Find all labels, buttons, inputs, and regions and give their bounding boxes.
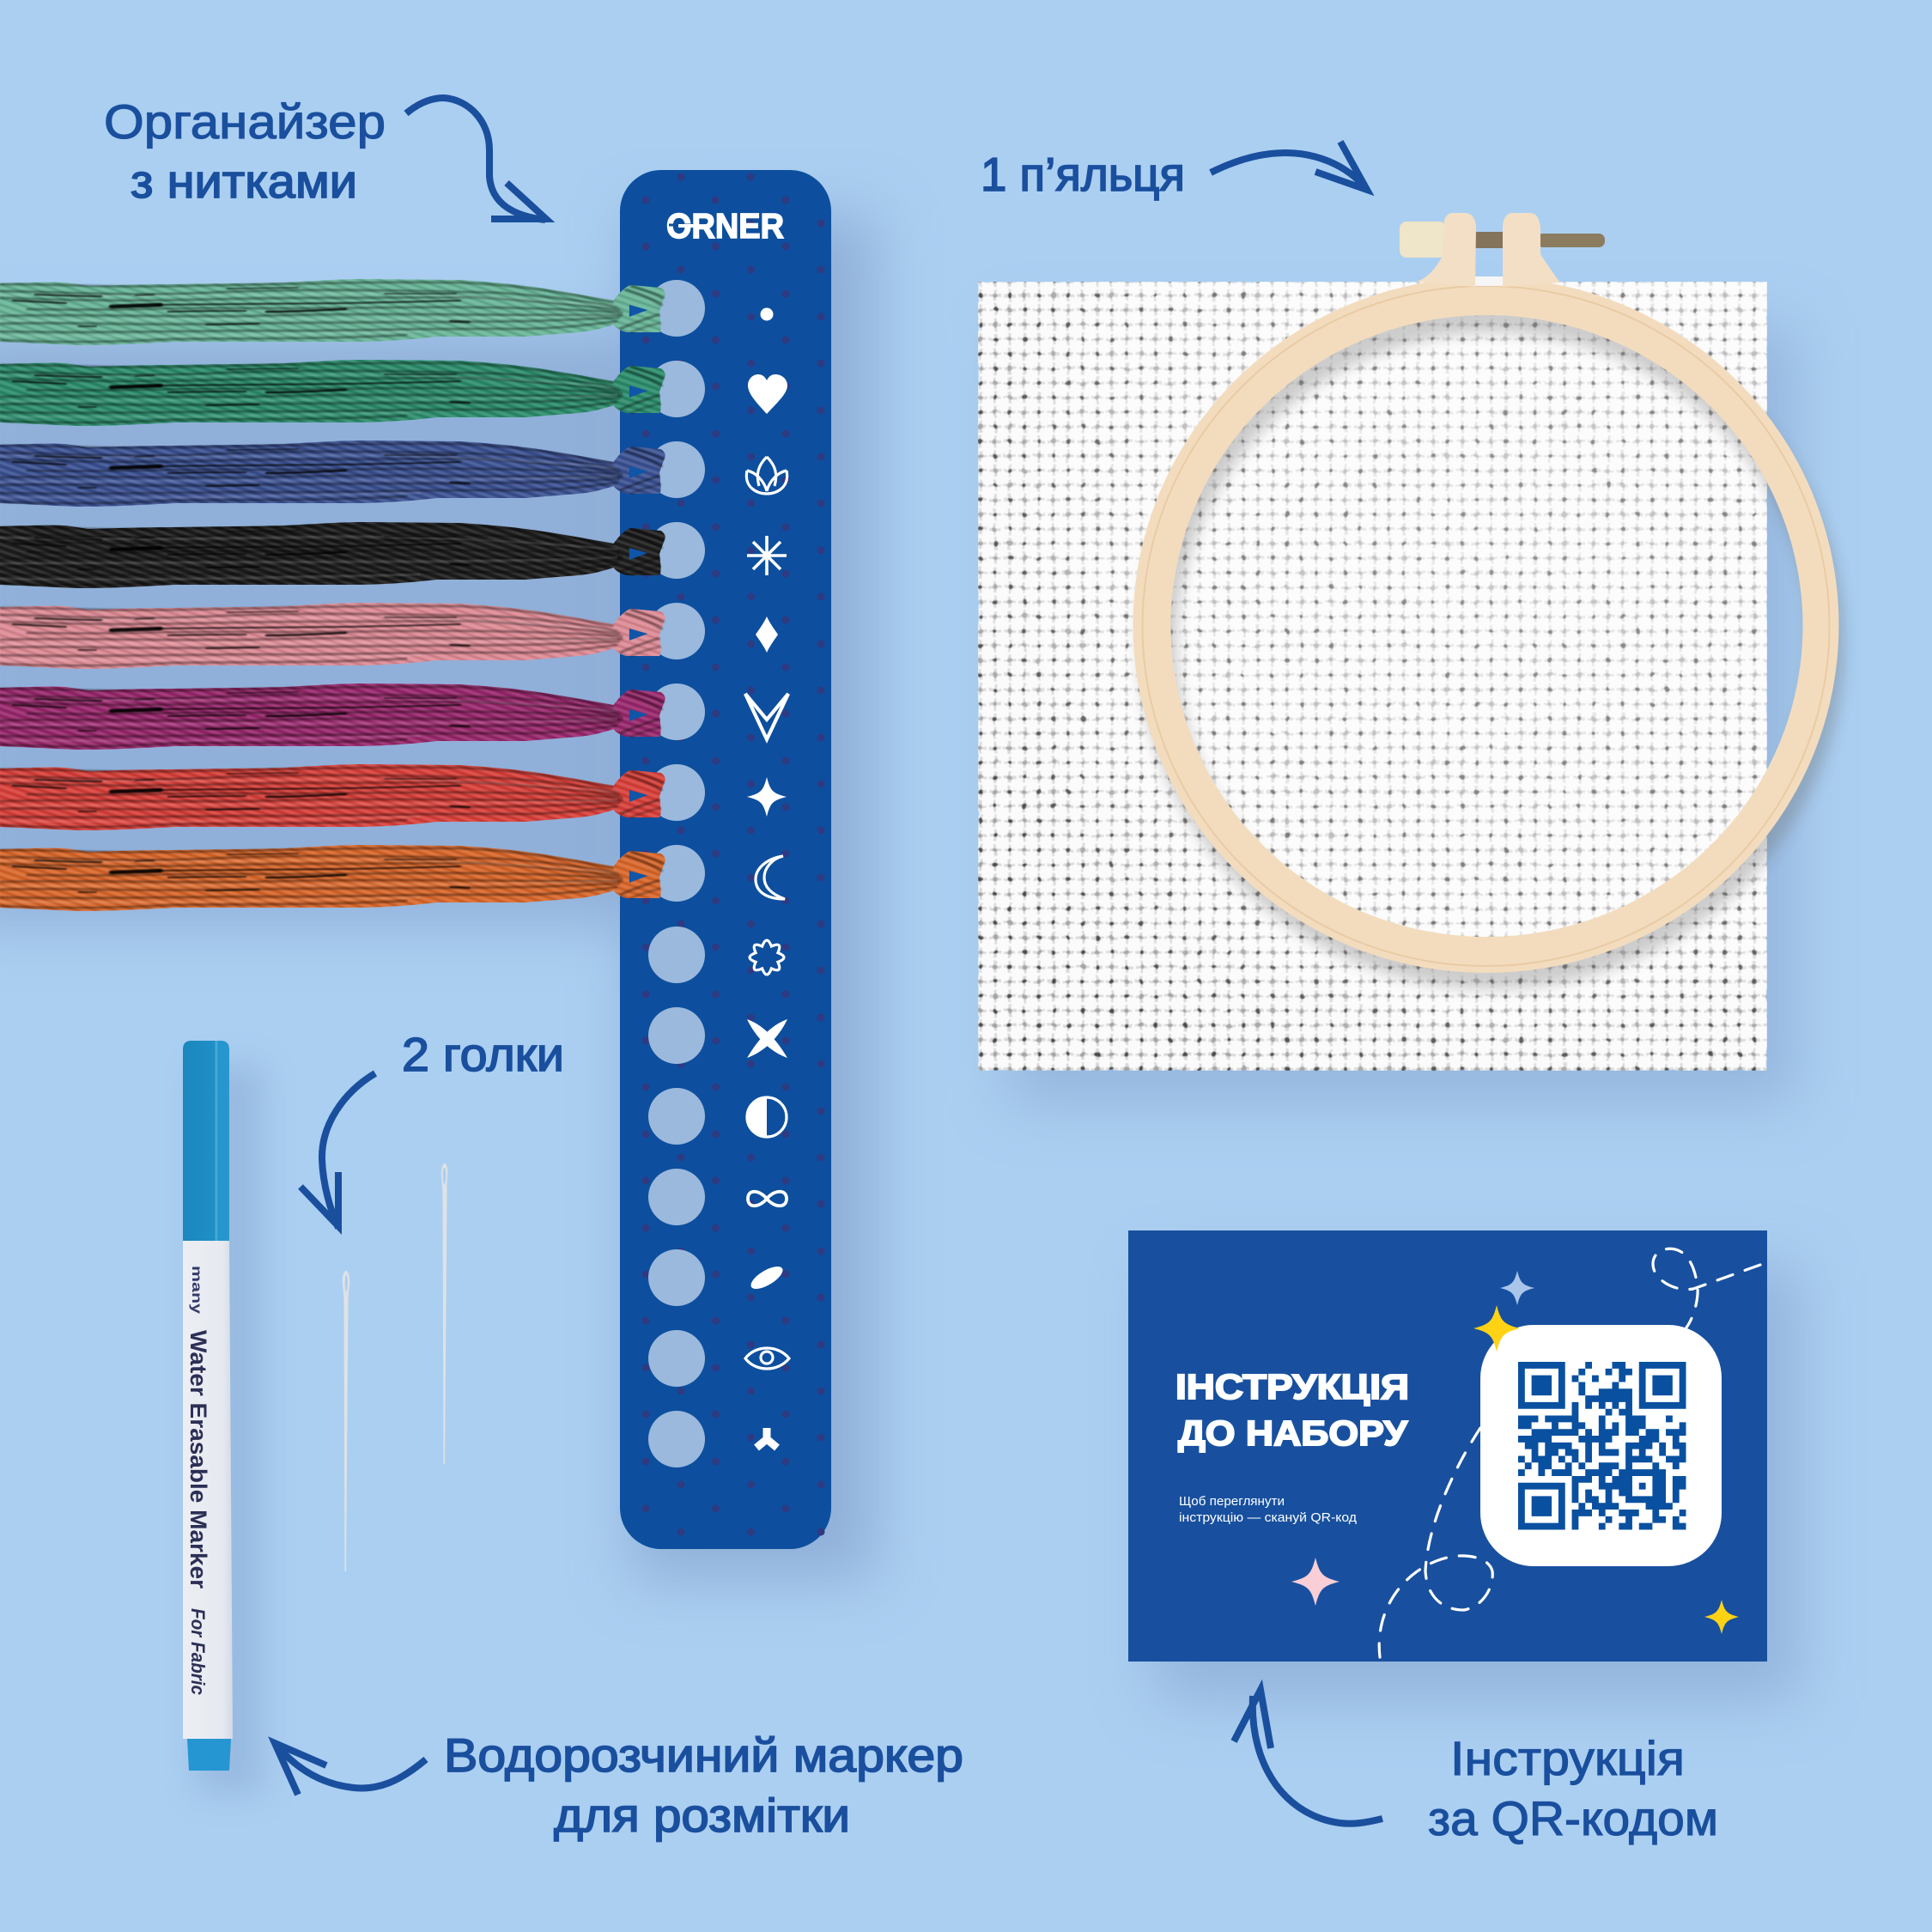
gap in the outer ring (1475, 276, 1503, 286)
marker lettering: for fabric: For Fabric (187, 1608, 209, 1695)
label: organizer with threads (104, 94, 386, 208)
icon: half circle (747, 1097, 787, 1137)
skein: red (0, 764, 665, 830)
polka dot pattern (641, 173, 825, 1532)
organizer card (620, 170, 831, 1549)
marker cap (183, 1041, 229, 1241)
aida fabric (978, 282, 1767, 1071)
icon: infinity (748, 1192, 787, 1206)
icon: arrowhead chevron (745, 694, 788, 739)
screw (1473, 232, 1605, 248)
icon: heart (748, 374, 787, 414)
card caption: інструкцію — скануй QR-код (1179, 1511, 1358, 1525)
card heading: ІНСТРУКЦІЯ (1176, 1367, 1409, 1406)
hoop shadow (1139, 295, 1844, 989)
arrow: to marker (275, 1743, 426, 1795)
card heading: ДО НАБОРУ (1178, 1413, 1408, 1453)
icon: asterisk (747, 536, 787, 575)
icon: dot (761, 307, 773, 321)
skein: pink (0, 603, 665, 669)
skein: orange (0, 845, 665, 911)
QR code (1518, 1362, 1686, 1530)
icon: flower (750, 940, 784, 975)
label: 2 needles: 2 голки (402, 1028, 564, 1081)
icon: oval leaf (748, 1262, 786, 1293)
skein: magenta (0, 683, 665, 750)
skein: emerald (0, 360, 665, 426)
icon: lotus (746, 457, 787, 494)
marker (183, 1041, 233, 1771)
hoop ring (1133, 277, 1839, 973)
icon: eye (745, 1348, 789, 1369)
ring highlight lines (1142, 286, 1829, 966)
tightening knob (1400, 222, 1446, 258)
dashed path (1379, 1249, 1760, 1657)
arrow: to needles (301, 1073, 375, 1228)
label: instruction via QR code (1428, 1731, 1718, 1845)
marker body (183, 1241, 233, 1739)
embroidery hoop (1133, 213, 1839, 973)
panel: thread organizer (620, 170, 831, 1549)
skein: indigo (0, 440, 665, 507)
card caption (1179, 1495, 1358, 1525)
icon: cross of leaves (747, 1019, 787, 1058)
marker lettering: Water Erasable Marker (185, 1330, 211, 1589)
star: small yellow (1704, 1600, 1739, 1634)
star: grey-blue (1500, 1271, 1534, 1305)
QR code plate (1480, 1325, 1722, 1566)
icon: four-point star (747, 777, 787, 817)
card caption: Щоб переглянути (1179, 1495, 1285, 1509)
icon: diamond (756, 617, 778, 653)
left bracket (1417, 213, 1476, 287)
label: organizer with threads: Органайзер (104, 94, 386, 149)
icon: three-arm shape (756, 1428, 777, 1448)
threads: eight coloured skeins (0, 279, 665, 911)
marker tip (187, 1739, 231, 1771)
star: pink (1291, 1558, 1340, 1606)
logo: ORNER: ORNER (666, 206, 784, 246)
marker brand: many (189, 1266, 204, 1314)
soft shadows under the objects (0, 215, 1799, 1700)
label: organizer with threads: з нитками (131, 155, 357, 208)
label: instruction via QR code: Інструкція (1450, 1731, 1685, 1785)
label: water-soluble marker: для розмітки (554, 1789, 850, 1842)
needle: left (343, 1271, 349, 1571)
star: large yellow (1473, 1305, 1520, 1352)
card heading (1176, 1367, 1409, 1453)
arrow: to instruction card (1234, 1690, 1382, 1824)
label: water-soluble marker (444, 1728, 963, 1842)
label: 1 hoop: 1 п’яльця (981, 148, 1185, 201)
needle: right (441, 1163, 447, 1464)
panel: aida fabric with hoop (978, 213, 1844, 1071)
thread holes (648, 280, 705, 1467)
skein: black (0, 522, 665, 588)
skein: light green (0, 279, 665, 345)
label: instruction via QR code: за QR-кодом (1428, 1791, 1718, 1845)
label: water-soluble marker: Водорозчиний маркер (444, 1728, 963, 1782)
arrow: to hoop (1211, 142, 1367, 190)
arrow: to organizer (406, 98, 546, 220)
panel: instruction card (1128, 1230, 1767, 1662)
icon: crescent (756, 856, 785, 899)
right bracket (1503, 213, 1560, 287)
